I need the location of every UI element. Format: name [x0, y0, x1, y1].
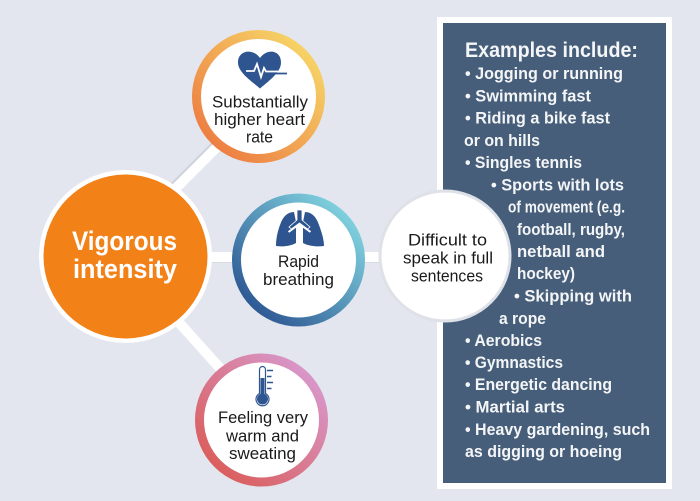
example list: • Singles tennis — [465, 154, 582, 172]
icon: heart with pulse — [238, 52, 287, 88]
icon: thermometer — [256, 366, 273, 406]
circle: feeling warm: Feeling very — [218, 408, 308, 427]
icon: lungs — [276, 210, 324, 246]
example list: • Skipping with — [514, 288, 632, 306]
example list: netball and — [517, 243, 605, 261]
example list: of movement (e.g. — [508, 199, 625, 217]
panel heading: Examples include: — [465, 39, 638, 62]
example list: hockey) — [517, 265, 575, 283]
central circle: vigorous intensity: Vigorous — [72, 226, 177, 256]
example list: • Heavy gardening, such — [465, 421, 650, 439]
circle: difficult to speak: sentences — [411, 267, 483, 286]
circle: difficult to speak — [380, 191, 510, 321]
circle: heart rate — [192, 30, 325, 163]
example list: • Swimming fast — [465, 88, 592, 106]
circle: rapid breathing — [232, 194, 365, 326]
example list: • Jogging or running — [465, 65, 623, 83]
circle: feeling warm: warm and — [225, 426, 299, 445]
example list: • Sports with lots — [491, 176, 624, 194]
central circle: vigorous intensity — [39, 170, 212, 343]
example list: • Riding a bike fast — [465, 110, 610, 128]
example list: a rope — [499, 310, 546, 328]
example list: football, rugby, — [517, 221, 625, 239]
circle: feeling warm — [195, 354, 328, 486]
circle: rapid breathing: breathing — [263, 270, 334, 289]
central circle: vigorous intensity: intensity — [73, 254, 177, 284]
circle: heart rate: rate — [246, 128, 273, 147]
example list: • Aerobics — [465, 332, 542, 350]
panel: examples — [437, 17, 672, 489]
connector lines — [170, 140, 385, 376]
example list — [464, 65, 650, 461]
circle: heart rate: Substantially — [212, 92, 308, 111]
example list: as digging or hoeing — [465, 443, 622, 461]
circle: feeling warm: sweating — [229, 444, 296, 463]
example list: or on hills — [464, 132, 540, 150]
example list: • Gymnastics — [465, 354, 563, 372]
circle: difficult to speak: speak in full — [403, 249, 493, 268]
circle: difficult to speak: Difficult to — [408, 231, 487, 250]
example list: • Energetic dancing — [465, 376, 612, 394]
circle: rapid breathing: Rapid — [278, 252, 319, 271]
example list: • Martial arts — [465, 399, 565, 417]
circle: heart rate: higher heart — [214, 110, 305, 129]
